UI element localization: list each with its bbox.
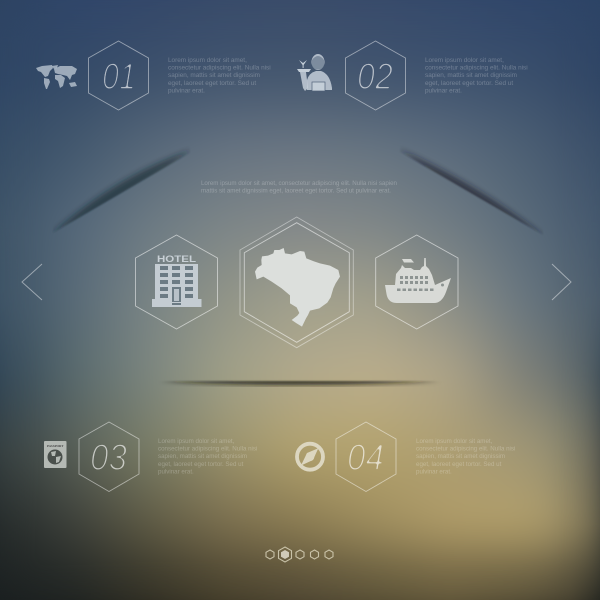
central text block: mattis sit amet dignissim eget, laoreet eget tortor. Sed ut pulvinar erat. [201, 188, 391, 194]
central text block: Lorem ipsum dolor sit amet, consectetur adipiscing elit. Nulla nisi sapien [201, 180, 398, 187]
left diagonal shadow [50, 150, 192, 236]
text block 02 [425, 57, 528, 94]
hexagon 01 [88, 41, 148, 110]
icon: Brazil map [255, 248, 340, 327]
text block 02: pulvinar erat. [425, 87, 462, 94]
icon: world map [36, 65, 77, 89]
ship badge [376, 235, 458, 329]
icon: passport [44, 441, 66, 468]
text block 01: eget, laoreet eget tortor. Sed ut [168, 80, 256, 87]
text block 03 [158, 438, 257, 475]
number 03: 03 [90, 437, 127, 478]
hexagon 02 [346, 41, 406, 110]
text block 02: Lorem ipsum dolor sit amet, [425, 57, 504, 64]
right diagonal shadow [398, 149, 546, 238]
hexagon 04 [336, 422, 396, 492]
text block 01: sapien, mattis sit amet dignissim [168, 72, 260, 79]
text block 04 [416, 438, 515, 475]
arrow: next [552, 264, 571, 300]
text block 01 [168, 57, 271, 94]
number 01: 01 [102, 56, 136, 97]
text block 04: eget, laoreet eget tortor. Sed ut [416, 461, 502, 468]
central text block [201, 180, 398, 194]
text block 04: Lorem ipsum dolor sit amet, [416, 438, 493, 445]
text block 01: pulvinar erat. [168, 87, 205, 94]
text block 04: consectetur adipiscing elit. Nulla nisi [416, 446, 515, 453]
text block 04: sapien, mattis sit amet dignissim [416, 453, 505, 460]
text block 03: eget, laoreet eget tortor. Sed ut [158, 461, 244, 468]
text block 03: Lorem ipsum dolor sit amet, [158, 438, 235, 445]
item 04 [297, 422, 515, 492]
number 04: 04 [347, 437, 384, 478]
item 03 [44, 422, 257, 492]
text block 03: pulvinar erat. [158, 468, 194, 475]
text block 01: Lorem ipsum dolor sit amet, [168, 57, 247, 64]
item 01 [36, 41, 271, 110]
text block 02: consectetur adipiscing elit. Nulla nisi [425, 65, 528, 72]
arrow: previous [22, 264, 42, 300]
Brazil badge [240, 217, 353, 348]
hexagon 03 [79, 422, 139, 492]
pagination dots [266, 547, 333, 562]
icon: hotel: HOTEL [157, 254, 196, 265]
icon: compass [297, 444, 323, 470]
icon: passport: PASSPORT [47, 444, 64, 448]
number 02: 02 [357, 56, 393, 97]
hotel badge [136, 235, 218, 329]
text block 04: pulvinar erat. [416, 468, 452, 475]
icon: cruise ship [385, 258, 451, 303]
bottom shadow [160, 378, 440, 385]
text block 02: eget, laoreet eget tortor. Sed ut [425, 80, 513, 87]
text block 02: sapien, mattis sit amet dignissim [425, 72, 517, 79]
icon: waiter [297, 54, 332, 91]
text block 03: sapien, mattis sit amet dignissim [158, 453, 247, 460]
text block 03: consectetur adipiscing elit. Nulla nisi [158, 446, 257, 453]
item 02 [297, 41, 528, 110]
text block 01: consectetur adipiscing elit. Nulla nisi [168, 65, 271, 72]
